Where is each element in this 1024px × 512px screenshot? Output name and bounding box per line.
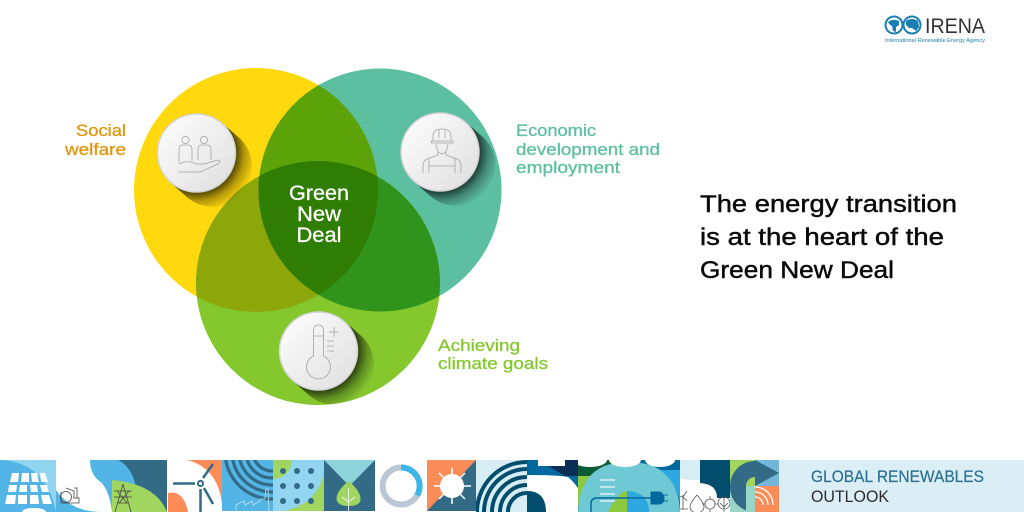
label: climate goals bbox=[438, 337, 548, 373]
tile: energy icons bbox=[678, 460, 730, 512]
headline bbox=[700, 191, 957, 284]
tile: ring bbox=[383, 467, 420, 504]
label: climate goals: climate goals bbox=[438, 355, 548, 373]
IRENA logo bbox=[885, 15, 985, 44]
venn diagram bbox=[134, 68, 502, 405]
label: economic development: employment bbox=[516, 159, 620, 177]
headline: The energy transition bbox=[700, 191, 957, 218]
tile: gas plant and pylon bbox=[56, 460, 168, 512]
panel: report title: OUTLOOK bbox=[811, 488, 889, 506]
icon disc: climate goals bbox=[280, 312, 374, 405]
label: economic development: development and bbox=[516, 141, 660, 159]
overlap: economic and climate bbox=[258, 161, 440, 312]
panel: report title: GLOBAL RENEWABLES bbox=[811, 468, 984, 486]
icon disc: social welfare bbox=[158, 114, 252, 207]
bottom decorative strip bbox=[0, 460, 1024, 512]
label: social welfare: welfare bbox=[64, 141, 126, 159]
label: economic development bbox=[516, 122, 660, 177]
icon: worker with hard hat bbox=[423, 129, 461, 173]
icon: thermometer bbox=[306, 325, 339, 379]
label: social welfare: Social bbox=[76, 122, 126, 140]
tile: concentric arcs bbox=[476, 460, 527, 512]
centre label: Deal bbox=[296, 224, 342, 247]
label: economic development: Economic bbox=[516, 122, 596, 140]
tile: solar panel bbox=[0, 460, 56, 512]
centre label: New bbox=[297, 203, 342, 226]
panel: report title bbox=[779, 460, 1024, 512]
icon disc: economic development bbox=[401, 113, 496, 206]
icon: people on hand bbox=[178, 136, 220, 172]
circle: social welfare bbox=[134, 68, 378, 312]
label: climate goals: Achieving bbox=[438, 337, 520, 355]
tile: plug bbox=[578, 460, 680, 512]
overlap: social and climate bbox=[196, 174, 318, 312]
tile: leaf bbox=[324, 460, 375, 511]
tile: wind turbine bbox=[168, 460, 222, 512]
circle: economic development bbox=[258, 68, 502, 312]
headline: is at the heart of the bbox=[700, 224, 944, 251]
tile: half circle bbox=[527, 460, 578, 512]
circle: climate goals bbox=[196, 161, 440, 405]
overlap: social and economic bbox=[259, 85, 378, 176]
IRENA logo: International Renewable Energy Agency bbox=[885, 38, 985, 44]
headline: Green New Deal bbox=[700, 257, 894, 284]
label: social welfare bbox=[64, 122, 126, 159]
tile: arcs and factory bbox=[222, 460, 273, 511]
tile: dots bbox=[273, 460, 324, 511]
IRENA logo: IRENA bbox=[925, 15, 985, 38]
centre label bbox=[289, 182, 349, 247]
tile: geometric bbox=[730, 460, 779, 512]
centre label: Green bbox=[289, 182, 349, 205]
tile: sun bbox=[427, 460, 476, 511]
overlap: centre bbox=[258, 161, 378, 295]
